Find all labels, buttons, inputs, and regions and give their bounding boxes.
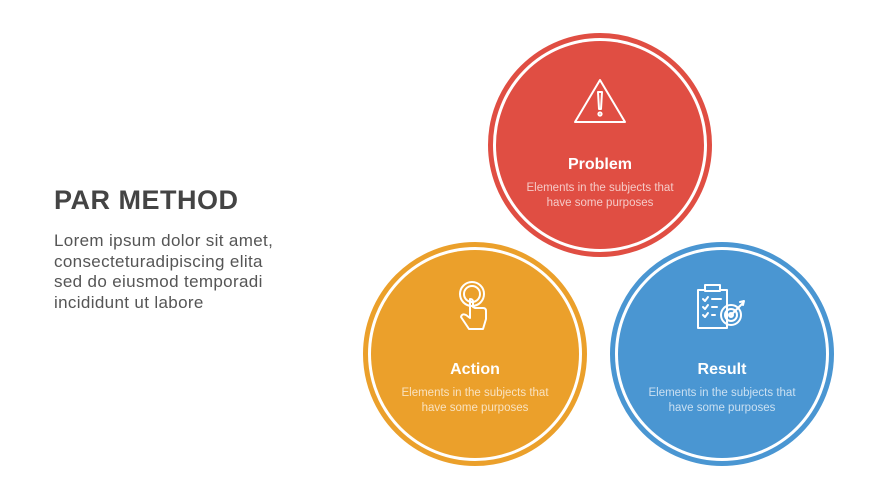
text: result description: Elements in the subjects that [648, 387, 796, 399]
text block: description: consecteturadipiscing elita [54, 252, 263, 270]
text: problem description: Elements in the subjects that [526, 182, 674, 194]
text: action description: Elements in the subjects that [401, 387, 549, 399]
label: Action: Action [450, 361, 500, 378]
circle: action: have some purposes [422, 402, 529, 414]
text block: description: sed do eiusmod temporadi [54, 272, 263, 291]
circle: problem: have some purposes [547, 197, 654, 209]
icon: hand pointer [460, 282, 486, 329]
text block: description [54, 231, 273, 312]
title: PAR METHOD [54, 185, 238, 215]
label: Result: Result [698, 361, 747, 378]
circle: result: have some purposes [669, 402, 776, 414]
icon: clipboard target [698, 285, 744, 328]
label: Problem: Problem [568, 156, 632, 173]
circle: action [366, 244, 584, 464]
circle: result [612, 244, 832, 464]
circle: problem [490, 36, 710, 254]
icon: warning triangle [575, 80, 625, 122]
text block: description: incididunt ut labore [54, 292, 204, 312]
text block: description: Lorem ipsum dolor sit amet, [54, 231, 273, 250]
